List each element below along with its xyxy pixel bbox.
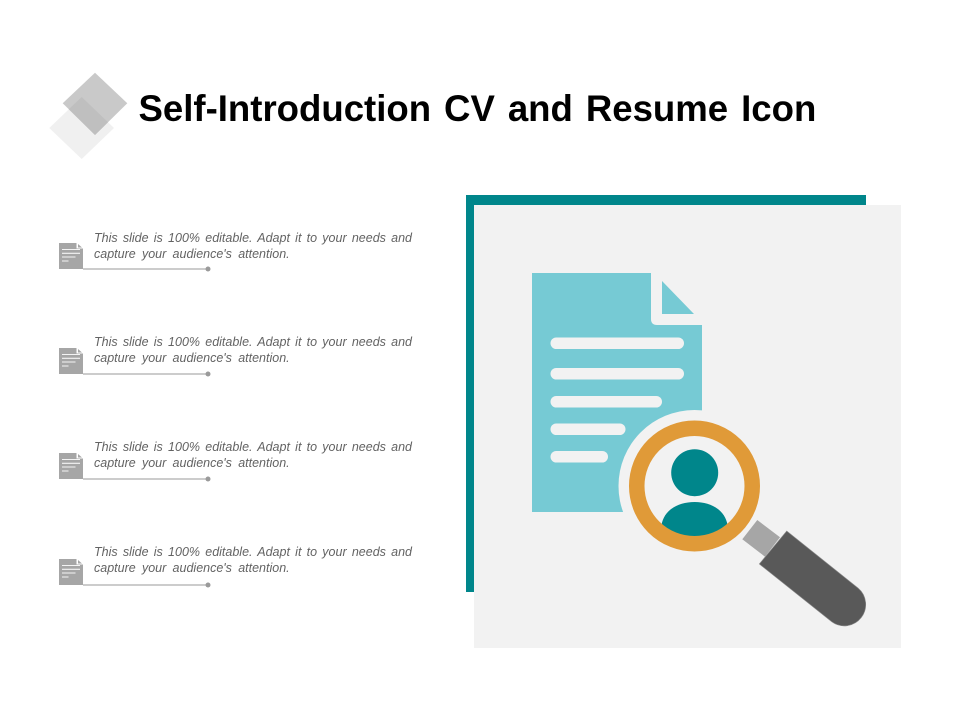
text block 3 <box>94 440 412 470</box>
title: Self-Introduction CV and Resume Icon <box>138 88 816 129</box>
text block 1: capture your audience's attention. <box>94 247 290 261</box>
text block 2: capture your audience's attention. <box>94 351 290 365</box>
text block 3: This slide is 100% editable. Adapt it to your needs and <box>94 440 412 454</box>
icon: magnifying glass with person <box>618 400 866 626</box>
text block 4 <box>94 545 412 575</box>
text block 2: This slide is 100% editable. Adapt it to your needs and <box>94 335 412 349</box>
text block 1 <box>94 231 412 261</box>
text block 4: capture your audience's attention. <box>94 561 290 575</box>
panel: illustration <box>466 195 901 648</box>
icon: document <box>532 273 702 512</box>
text block 3: capture your audience's attention. <box>94 456 290 470</box>
text block 2 <box>94 335 412 365</box>
text block 4: This slide is 100% editable. Adapt it to your needs and <box>94 545 412 559</box>
text block 1: This slide is 100% editable. Adapt it to your needs and <box>94 231 412 245</box>
